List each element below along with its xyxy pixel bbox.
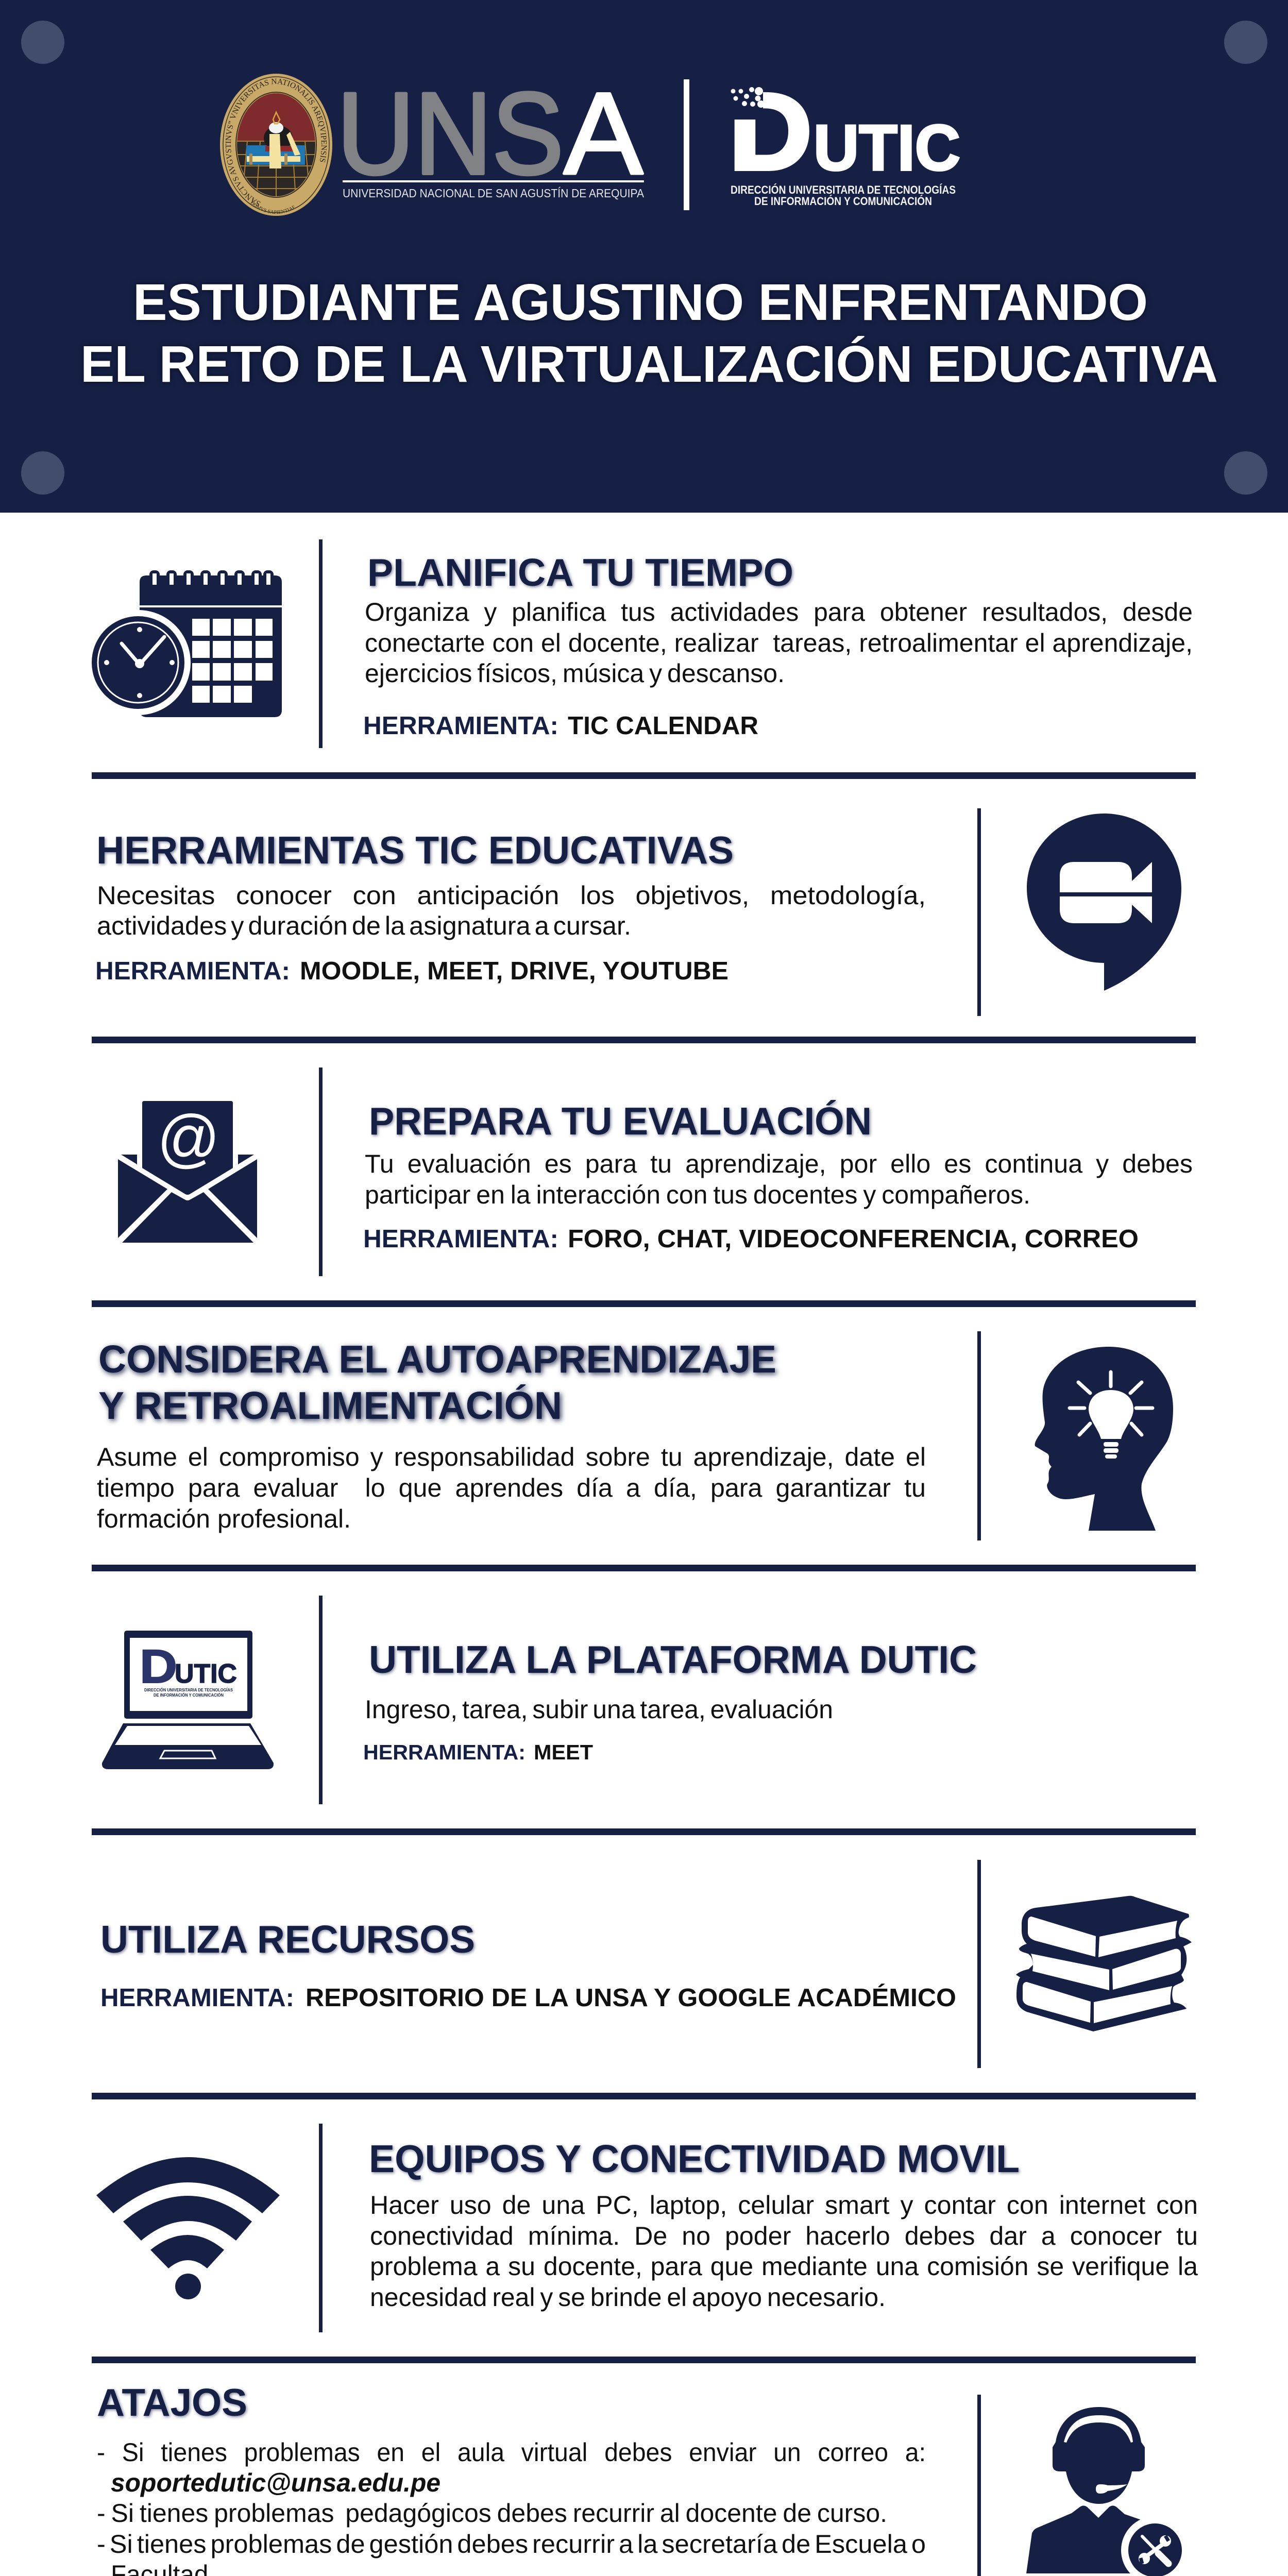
body text: problema a su docente, para que mediante una comisión se verifique la [370, 2252, 1198, 2281]
icon: video chat bubble [1027, 814, 1181, 991]
heading: ATAJOS [97, 2381, 247, 2424]
tool line: REPOSITORIO DE LA UNSA Y GOOGLE ACADÉMICO [306, 1984, 956, 2012]
logo: DUTIC [726, 71, 960, 208]
icon: support agent with tools [1026, 2407, 1190, 2576]
tool line: MEET [534, 1740, 593, 1764]
logo: UNSA wordmark: UNS [337, 68, 564, 198]
body text [97, 881, 926, 940]
heading: UTILIZA RECURSOS [100, 1918, 475, 1961]
body text: conectarte con el docente, realizar tareas, retroalimentar el aprendizaje, [365, 629, 1193, 657]
icon: envelope with at sign: @ [156, 1103, 219, 1174]
body text [97, 1443, 926, 1533]
panel: herramientas tic educativas [95, 808, 1181, 1016]
body text: - Si tienes problemas pedagógicos debes recurrir al docente de curso. [97, 2499, 887, 2528]
heading: EQUIPOS Y CONECTIVIDAD MOVIL [369, 2137, 1020, 2180]
body text: Necesitas conocer con anticipación los objetivos, metodología, [97, 881, 926, 910]
heading [98, 1337, 776, 1427]
body text [365, 598, 1193, 688]
icon: laptop with DUTIC logo: DIRECCIÓN UNIVERSITARIA DE TECNOLOGÍAS [144, 1688, 233, 1692]
panel: header [0, 0, 1288, 513]
body text: Organiza y planifica tus actividades para obtener resultados, desde [365, 598, 1193, 626]
tool line: HERRAMIENTA: [363, 1740, 526, 1764]
heading: UTILIZA LA PLATAFORMA DUTIC [369, 1638, 977, 1681]
body text: Ingreso, tarea, subir una tarea, evaluación [365, 1695, 833, 1724]
tool line: HERRAMIENTA: [363, 1225, 558, 1253]
icon: head with light bulb [1035, 1347, 1173, 1531]
panel: equipos y conectividad [96, 2124, 1198, 2332]
body text: - Si tienes problemas de gestión debes recurrir a la secretaría de Escuela o [97, 2530, 926, 2558]
logo: DUTIC: DIRECCIÓN UNIVERSITARIA DE TECNOLOGÍAS [731, 183, 956, 196]
tool line [95, 957, 728, 985]
body text [365, 1149, 1193, 1209]
panel: utiliza recursos [100, 1860, 1192, 2068]
tool line [363, 712, 758, 740]
heading: Y RETROALIMENTACIÓN [98, 1384, 562, 1427]
icon: wifi [96, 2157, 280, 2299]
heading: PLANIFICA TU TIEMPO [367, 551, 793, 594]
panel: plataforma dutic [102, 1596, 977, 1804]
body text: - Si tienes problemas en el aula virtual debes enviar un correo a: [97, 2438, 926, 2467]
icon: laptop with DUTIC logo: UTIC [175, 1659, 237, 1689]
body text: tiempo para evaluar lo que aprendes día a día, para garantizar tu [97, 1473, 926, 1502]
body text: Asume el compromiso y responsabilidad sobre tu aprendizaje, date el [97, 1443, 926, 1471]
heading: HERRAMIENTAS TIC EDUCATIVAS [96, 828, 734, 872]
logo: UNSA wordmark: UNIVERSIDAD NACIONAL DE SAN AGUSTÍN DE AREQUIPA [343, 187, 645, 200]
body text: ejercicios físicos, música y descanso. [365, 659, 785, 688]
icon: envelope with at sign [118, 1101, 257, 1243]
heading: PREPARA TU EVALUACIÓN [369, 1099, 872, 1143]
tool line: HERRAMIENTA: [363, 712, 558, 740]
tool line: TIC CALENDAR [568, 712, 758, 740]
body text: participar en la interacción con tus docentes y compañeros. [365, 1180, 1030, 1209]
logo: DUTIC: UTIC [814, 112, 960, 184]
panel: planifica tu tiempo [86, 539, 1193, 748]
body text: necesidad real y se brinde el apoyo necesario. [370, 2283, 886, 2312]
icon: calendar and clock [86, 570, 282, 717]
logo: DUTIC: D [729, 71, 812, 192]
logo: UNSA wordmark: A [564, 68, 643, 198]
body text: conectividad mínima. De no poder hacerlo debes dar a conocer tu [370, 2222, 1198, 2250]
icon: stack of books [1016, 1896, 1192, 2031]
tool line: HERRAMIENTA: [95, 957, 290, 985]
panel: autoaprendizaje [97, 1331, 1173, 1540]
panel: atajos [97, 2381, 1190, 2576]
panel: prepara tu evaluacion [118, 1067, 1193, 1276]
title: ESTUDIANTE AGUSTINO ENFRENTANDO [133, 274, 1148, 331]
title: EL RETO DE LA VIRTUALIZACIÓN EDUCATIVA [80, 335, 1218, 393]
heading: CONSIDERA EL AUTOAPRENDIZAJE [98, 1337, 776, 1381]
body text [370, 2191, 1198, 2312]
logo: UNSA seal: DOMVS SAPIENTIAE [250, 201, 296, 214]
body text [97, 2438, 926, 2576]
tool line: HERRAMIENTA: [100, 1984, 294, 2012]
body text: formación profesional. [97, 1504, 351, 1533]
logo: UNSA seal: SANCTVS AVGVSTINVS” VNIVERSITAS NATIONALIS AREQVIPENSIS [226, 78, 327, 206]
icon: laptop with DUTIC logo: D [140, 1640, 177, 1693]
icon: laptop with DUTIC logo: DE INFORMACIÓN Y COMUNICACIÓN [154, 1693, 224, 1698]
body text: Tu evaluación es para tu aprendizaje, por ello es continua y debes [365, 1149, 1193, 1178]
logo: DUTIC: DE INFORMACIÓN Y COMUNICACIÓN [754, 195, 932, 208]
icon: laptop with DUTIC logo [102, 1631, 274, 1769]
tool line: MOODLE, MEET, DRIVE, YOUTUBE [300, 957, 728, 985]
body text: soportedutic@unsa.edu.pe [111, 2468, 440, 2497]
body text: actividades y duración de la asignatura a cursar. [97, 911, 631, 940]
decorative corner dots [21, 21, 1267, 495]
title [80, 274, 1218, 393]
tool line: FORO, CHAT, VIDEOCONFERENCIA, CORREO [568, 1225, 1139, 1253]
body text: Hacer uso de una PC, laptop, celular smart y contar con internet con [370, 2191, 1198, 2219]
